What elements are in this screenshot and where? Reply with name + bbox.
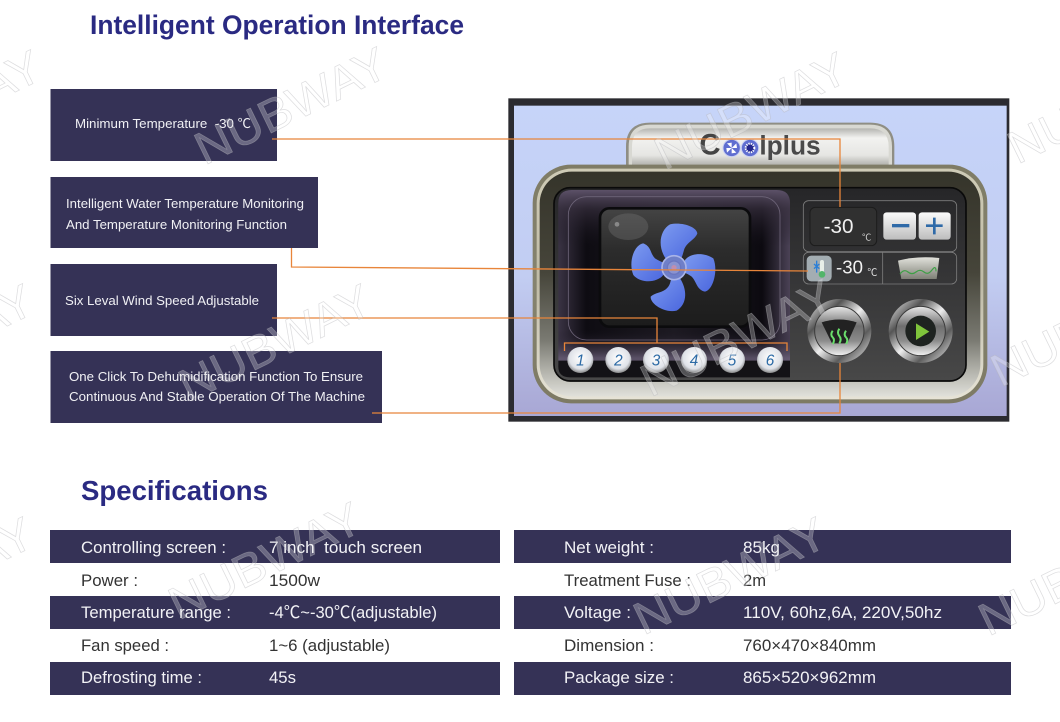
spec table: right column: 85kg bbox=[743, 538, 780, 557]
spec table: right column: Voltage : bbox=[564, 603, 631, 622]
device face bbox=[554, 188, 966, 381]
defrost button bbox=[807, 299, 871, 363]
label box: dehumidification: One Click To Dehumidification Function To Ensure bbox=[69, 369, 363, 384]
label box: minimum temperature: Minimum Temperature -30 ℃ bbox=[75, 116, 251, 131]
spec table: left column: Power : bbox=[81, 571, 138, 590]
logo tab: Coolplus: C bbox=[699, 128, 721, 161]
spec table: right column: Treatment Fuse : bbox=[564, 571, 691, 590]
label box: dehumidification bbox=[50, 351, 382, 423]
wind speed buttons 1-6: 3 bbox=[652, 353, 661, 370]
label box: water temperature monitoring bbox=[50, 177, 318, 248]
label box: water temperature monitoring: And Temperature Monitoring Function bbox=[66, 217, 287, 232]
water temperature monitor box bbox=[803, 252, 957, 284]
spec table: right column: Package size : bbox=[564, 668, 674, 687]
start button bbox=[889, 299, 953, 363]
spec table: left column: 1~6 (adjustable) bbox=[269, 636, 390, 655]
spec table: left column: Temperature range : bbox=[81, 603, 231, 622]
callout lines bbox=[272, 139, 840, 413]
spec table: left column: 7 inch touch screen bbox=[269, 538, 422, 557]
spec table: right column: 865×520×962mm bbox=[743, 668, 876, 687]
watermarks: NUBWAY: NUBWAY bbox=[646, 42, 856, 180]
watermarks: NUBWAY: NUBWAY bbox=[160, 492, 370, 630]
spec table: left column: 1500w bbox=[269, 571, 321, 590]
watermarks: NUBWAY: NUBWAY bbox=[186, 37, 396, 175]
spec table: right column: 2m bbox=[743, 571, 766, 590]
title: Intelligent Operation Interface: Intelligent Operation Interface bbox=[90, 10, 464, 40]
wind speed buttons 1-6: 4 bbox=[690, 353, 698, 370]
temperature setting box: -30 bbox=[824, 215, 854, 238]
watermarks: NUBWAY: NUBWAY bbox=[170, 274, 380, 412]
spec table: left column bbox=[50, 530, 500, 695]
spec table: left column: -4℃~-30℃(adjustable) bbox=[269, 603, 437, 622]
label box: minimum temperature bbox=[50, 89, 277, 161]
water temperature monitor box: ℃ bbox=[867, 268, 877, 279]
device shell bbox=[533, 165, 987, 403]
spec table: right column: 760×470×840mm bbox=[743, 636, 876, 655]
label box: water temperature monitoring: Intelligent Water Temperature Monitoring bbox=[66, 196, 304, 211]
wind speed buttons 1-6: 5 bbox=[728, 353, 737, 370]
left fan display bbox=[558, 190, 790, 377]
logo tab: Coolplus: lplus bbox=[759, 130, 821, 160]
watermarks: NUBWAY: NUBWAY bbox=[632, 269, 842, 407]
wind speed buttons 1-6: 1 bbox=[576, 353, 585, 370]
label box: wind speed: Six Leval Wind Speed Adjustable bbox=[65, 293, 259, 308]
panel: control interface illustration bbox=[508, 98, 1009, 422]
spec table: left column: Controlling screen : bbox=[81, 538, 226, 557]
wind speed buttons 1-6: 2 bbox=[613, 353, 623, 370]
wind speed buttons 1-6: 6 bbox=[766, 353, 775, 370]
wind speed strip bbox=[558, 361, 790, 377]
label box: dehumidification: Continuous And Stable Operation Of The Machine bbox=[69, 389, 365, 404]
watermarks: NUBWAY: NUBWAY bbox=[625, 507, 835, 645]
spec table: right column: Net weight : bbox=[564, 538, 654, 557]
spec table: left column: Defrosting time : bbox=[81, 668, 202, 687]
spec table: left column: 45s bbox=[269, 668, 296, 687]
heading: Specifications: Specifications bbox=[81, 475, 268, 506]
wind speed buttons 1-6 bbox=[567, 347, 783, 373]
spec table: left column: Fan speed : bbox=[81, 636, 169, 655]
spec table: right column: 110V, 60hz,6A, 220V,50hz bbox=[743, 603, 942, 622]
icon: blue fan bbox=[631, 224, 715, 311]
spec table: right column: Dimension : bbox=[564, 636, 654, 655]
logo tab: Coolplus bbox=[626, 123, 894, 169]
panel frame and background bbox=[508, 98, 1009, 422]
spec table: right column bbox=[514, 530, 1011, 695]
temperature setting box: ℃ bbox=[862, 233, 871, 243]
water temperature monitor box: -30 bbox=[836, 256, 863, 277]
temperature setting box bbox=[803, 201, 957, 252]
label box: wind speed bbox=[50, 264, 277, 336]
